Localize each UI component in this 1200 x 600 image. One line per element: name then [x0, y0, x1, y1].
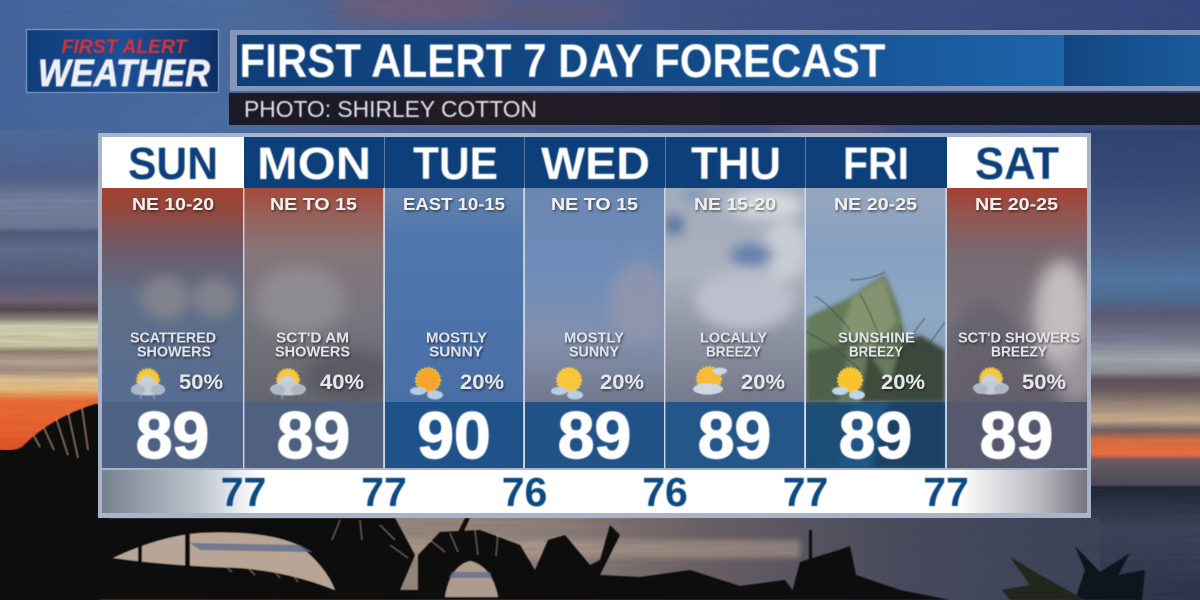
- condition descriptions: SCT'D SHOWERS: [958, 330, 1080, 346]
- icon: sun with cloud, Saturday: [973, 368, 1009, 394]
- forecast panel: [98, 133, 1097, 518]
- precipitation chances: 20%: [741, 371, 785, 394]
- day headers: FRI: [843, 138, 909, 189]
- sea visible beneath middle fronds: [445, 561, 498, 597]
- day headers: WED: [541, 138, 650, 189]
- high temperatures: 89: [136, 398, 209, 472]
- condition descriptions: SUNNY: [569, 344, 619, 360]
- icon: mostly sunny, Tuesday: [410, 368, 443, 400]
- condition descriptions: SUNSHINE: [838, 330, 915, 346]
- wind text row: NE TO 15: [270, 194, 357, 214]
- high temperatures: 90: [417, 398, 491, 472]
- condition descriptions: MOSTLY: [426, 330, 487, 346]
- condition descriptions: LOCALLY: [700, 330, 767, 346]
- day headers: THU: [691, 138, 781, 189]
- wind text row: NE 20-25: [834, 194, 917, 214]
- photo: Friday palm tree: [806, 272, 945, 468]
- wind text row: NE 10-20: [132, 194, 214, 214]
- day headers: TUE: [413, 138, 498, 189]
- icon: sun with clouds, Friday: [832, 368, 865, 400]
- logo: First Alert Weather: WEATHER: [38, 53, 211, 95]
- photo credit bar: PHOTO: SHIRLEY COTTON: [244, 96, 537, 122]
- high temperatures: 89: [558, 398, 631, 472]
- high temperatures: 89: [839, 398, 912, 472]
- precipitation chances: [179, 371, 1066, 394]
- palm: bottom frond highlights: [225, 520, 498, 582]
- sea visible beneath left fronds: [113, 532, 335, 590]
- wind text row: NE 15-20: [694, 194, 776, 214]
- condition descriptions: SHOWERS: [137, 344, 211, 360]
- palm posts over sea patch: [138, 518, 190, 573]
- palm: bottom right: [1075, 546, 1145, 600]
- palm tree silhouettes: [0, 404, 1145, 600]
- column backgrounds: [102, 188, 1087, 402]
- photo textures: clouds: [141, 189, 1097, 405]
- high temperatures: 89: [698, 398, 771, 472]
- icon: sun with rain cloud, Monday: [270, 369, 306, 399]
- condition descriptions: BREEZY: [849, 344, 903, 360]
- precipitation chances: 40%: [320, 371, 364, 394]
- low temperature band: 77: [361, 469, 407, 515]
- low temperature band: 76: [502, 469, 547, 515]
- high temperatures: 89: [277, 398, 350, 472]
- low temperature band: 76: [642, 469, 688, 515]
- condition descriptions: BREEZY: [706, 344, 761, 360]
- palm: left frond highlights: [34, 408, 88, 458]
- palm shadow through temperature band: [806, 402, 945, 468]
- icon: sun with clouds, Thursday: [693, 367, 727, 394]
- high temperature band: [102, 402, 1087, 468]
- palm: left foreground: [0, 404, 110, 600]
- day headers: SAT: [975, 138, 1059, 189]
- blue streak in the left sea patch: [190, 543, 312, 552]
- palm: faint green frond: [1002, 557, 1085, 600]
- condition descriptions: SCATTERED: [130, 330, 216, 346]
- condition descriptions: SHOWERS: [275, 344, 350, 360]
- condition descriptions: SUNNY: [429, 344, 483, 360]
- condition descriptions: MOSTLY: [564, 330, 624, 346]
- icon: sun with rain cloud, Sunday: [131, 369, 165, 399]
- low temperature band: 77: [783, 469, 828, 515]
- low temperature band: 77: [923, 469, 969, 515]
- precipitation chances: 50%: [1022, 371, 1066, 394]
- palm: bottom foreground mass: [100, 518, 950, 600]
- wind text row: NE 20-25: [975, 194, 1058, 214]
- title banner: [230, 30, 1200, 91]
- precipitation chances: 50%: [179, 371, 223, 394]
- panel frame: [98, 133, 1091, 518]
- wind text row: EAST 10-15: [403, 194, 505, 214]
- condition descriptions: SCT'D AM: [276, 330, 349, 346]
- wind text row: [132, 194, 1058, 214]
- title banner: FIRST ALERT 7 DAY FORECAST: [240, 34, 886, 87]
- wind text row: NE TO 15: [551, 194, 638, 214]
- day headers: SUN: [128, 138, 218, 189]
- precipitation chances: 20%: [460, 371, 504, 394]
- low temperature band: 77: [221, 469, 266, 515]
- condition descriptions: [130, 330, 1080, 360]
- day headers: [102, 137, 1087, 189]
- precipitation chances: 20%: [881, 371, 925, 394]
- blue streak in the middle sea patch: [449, 572, 492, 578]
- logo: First Alert Weather: FIRST ALERT: [62, 37, 188, 58]
- low temperature band: [102, 469, 1087, 515]
- column dividers: [243, 188, 947, 468]
- condition descriptions: BREEZY: [991, 344, 1047, 360]
- logo: First Alert Weather: [26, 30, 218, 95]
- high temperatures: [136, 398, 1053, 472]
- day headers: MON: [257, 138, 371, 189]
- high temperatures: 89: [980, 398, 1053, 472]
- palm frond strands: [806, 272, 945, 370]
- icon: mostly sunny, Wednesday: [551, 368, 583, 400]
- precipitation chances: 20%: [600, 371, 644, 394]
- photo credit bar: [229, 93, 1200, 125]
